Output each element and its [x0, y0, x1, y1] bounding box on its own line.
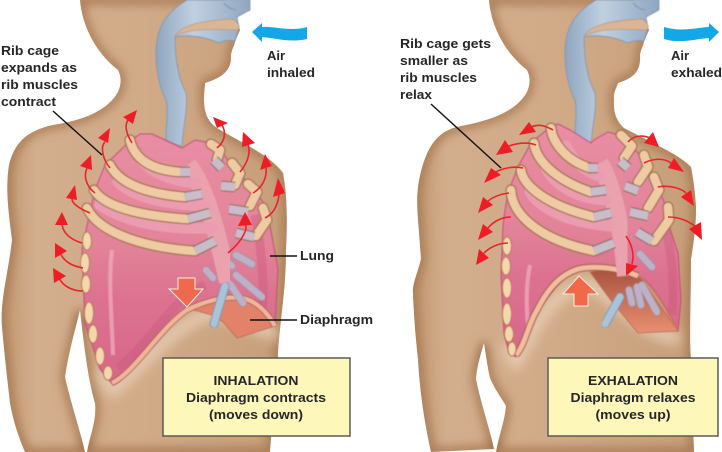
callout: exhalation [548, 358, 718, 436]
diaphragm down arrow [169, 278, 203, 307]
red expansion arrows [53, 110, 285, 291]
leader line: rib cage smaller [431, 104, 501, 168]
label: diaphragm: Diaphragm [300, 312, 373, 327]
airway [565, 0, 659, 146]
callout: inhalation: (moves down) [209, 407, 303, 422]
label: rib cage smaller: relax [400, 87, 433, 102]
diaphragm up arrow [563, 276, 598, 306]
label: rib cage expands: expands as [1, 60, 77, 75]
label: rib cage smaller: Rib cage gets [400, 36, 491, 51]
label: diaphragm [250, 312, 373, 327]
air exhaled arrow [664, 23, 719, 42]
diaphragm [516, 267, 678, 355]
central mediastinum [188, 165, 228, 282]
label: air exhaled [671, 48, 722, 80]
figure: exhalation [413, 0, 719, 452]
label: air inhaled: inhaled [267, 65, 315, 80]
label: air inhaled: Air [267, 48, 285, 63]
thorax and lungs [501, 124, 681, 357]
label: lung [270, 248, 334, 263]
red contraction arrows [476, 122, 702, 276]
ribs [80, 140, 267, 380]
diaphragm [112, 298, 275, 383]
central mediastinum [600, 163, 626, 276]
bronchi and esophagus [605, 254, 657, 324]
body silhouette [2, 0, 287, 452]
bronchi and esophagus [206, 255, 262, 324]
palate and lip [175, 19, 239, 36]
body silhouette [413, 0, 696, 452]
label: rib cage expands: contract [1, 94, 57, 109]
label: air exhaled: Air [671, 48, 689, 63]
air inhaled arrow [252, 23, 307, 42]
label: air inhaled [267, 48, 315, 80]
airway [156, 0, 250, 146]
label: rib cage expands [1, 43, 78, 109]
callout: exhalation: (moves up) [596, 407, 670, 422]
callout: inhalation: Diaphragm contracts [186, 390, 326, 405]
callout: inhalation: INHALATION [214, 373, 298, 388]
label: rib cage smaller [400, 36, 491, 102]
label: rib cage smaller: rib muscles [400, 70, 477, 85]
thorax and lungs [82, 134, 278, 385]
label: rib cage expands: Rib cage [1, 43, 59, 58]
label: rib cage smaller: smaller as [400, 53, 468, 68]
ribs [502, 128, 669, 356]
figure: inhalation [2, 0, 307, 452]
callout: exhalation: Diaphragm relaxes [570, 390, 696, 405]
label: rib cage expands: rib muscles [1, 77, 78, 92]
label: air exhaled: exhaled [671, 65, 722, 80]
label: lung: Lung [300, 248, 334, 263]
callout: inhalation [163, 358, 350, 436]
palate and lip [584, 19, 648, 36]
callout: exhalation: EXHALATION [588, 373, 678, 388]
leader line: rib cage [53, 111, 102, 155]
